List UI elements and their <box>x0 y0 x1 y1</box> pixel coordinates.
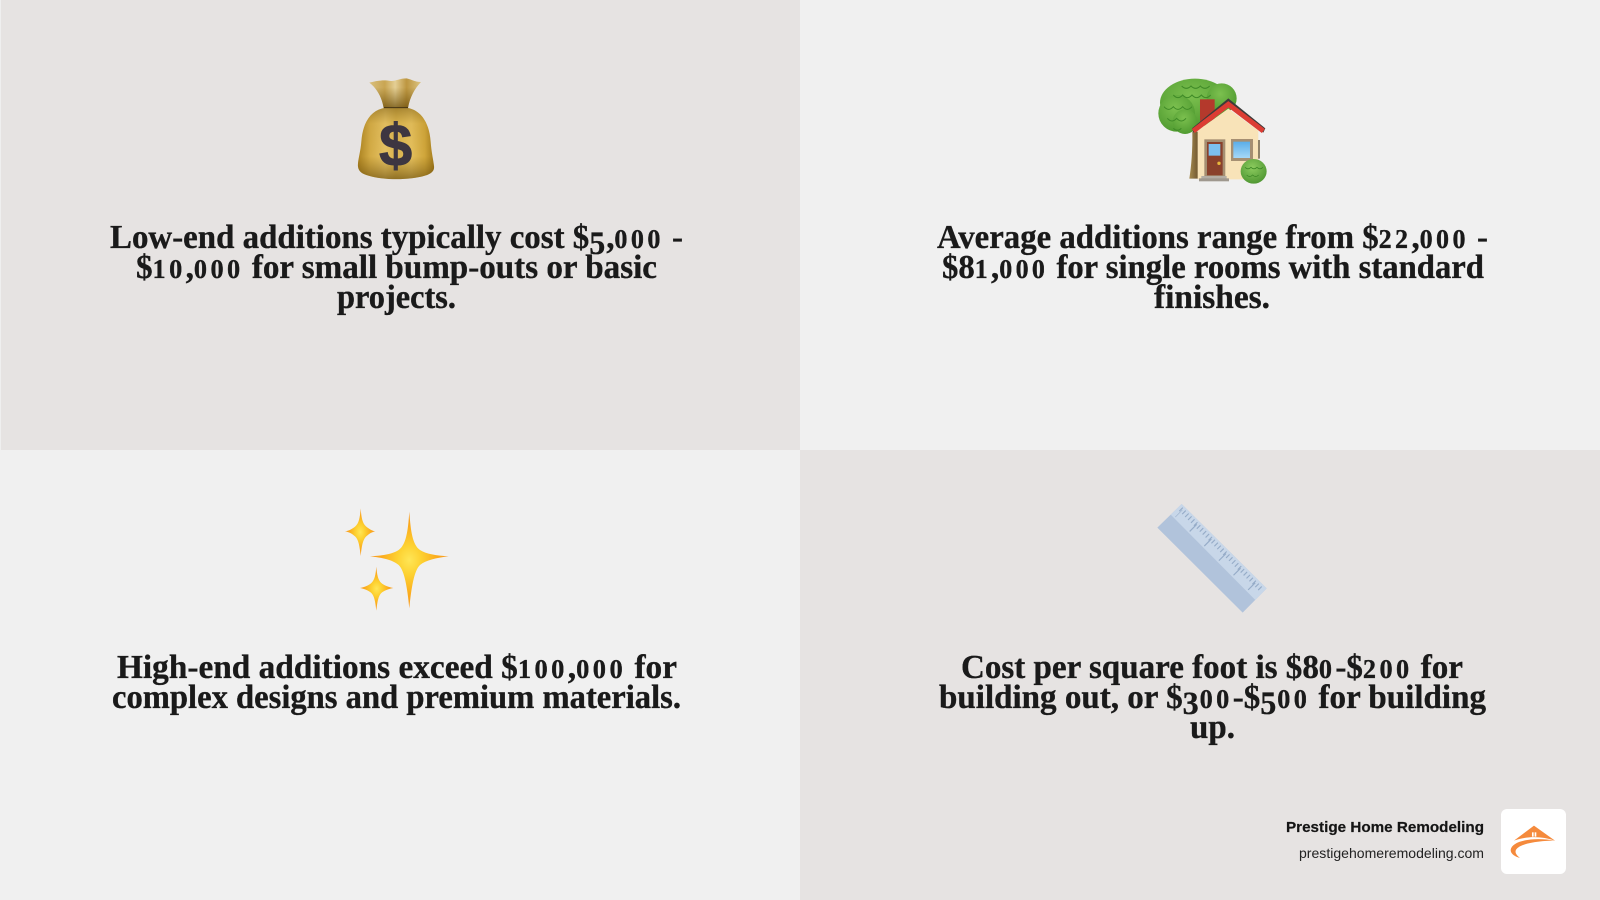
heading: square foot text <box>939 649 1486 746</box>
heading: low-end text: $10,000 for small bump-outs or basic <box>136 249 657 286</box>
heading: square foot text: up. <box>1190 709 1235 746</box>
heading: low-end text: Low-end additions typically cost $5,000 - <box>110 219 683 262</box>
icon: money bag: $ <box>379 112 412 179</box>
heading: average text <box>937 219 1488 316</box>
icon: money bag <box>358 78 434 179</box>
heading: square foot text: Cost per square foot is $80-$200 for <box>961 649 1463 686</box>
heading: high-end text: High-end additions exceed $100,000 for <box>117 649 677 686</box>
panel: average additions <box>800 0 1600 450</box>
icon: sparkles <box>345 508 449 611</box>
icon: ruler <box>1157 504 1267 613</box>
brand url: prestigehomeremodeling.com <box>1299 845 1484 861</box>
brand name: Prestige Home Remodeling <box>1286 819 1484 836</box>
heading: high-end text <box>112 649 681 716</box>
heading: high-end text: complex designs and premium materials. <box>112 679 681 716</box>
heading: low-end text: projects. <box>337 279 456 316</box>
heading: average text: Average additions range from $22,000 - <box>937 219 1488 256</box>
heading: low-end text <box>110 219 683 316</box>
panel: cost per square foot <box>800 450 1600 900</box>
heading: average text: finishes. <box>1154 279 1270 316</box>
heading: square foot text: building out, or $300-$500 for building <box>939 679 1486 722</box>
heading: average text: $81,000 for single rooms with standard <box>942 249 1484 286</box>
panel: high-end additions <box>0 450 800 900</box>
icon: house with tree <box>1158 79 1267 184</box>
panel: low-end additions <box>0 0 800 450</box>
logo <box>1501 809 1566 874</box>
